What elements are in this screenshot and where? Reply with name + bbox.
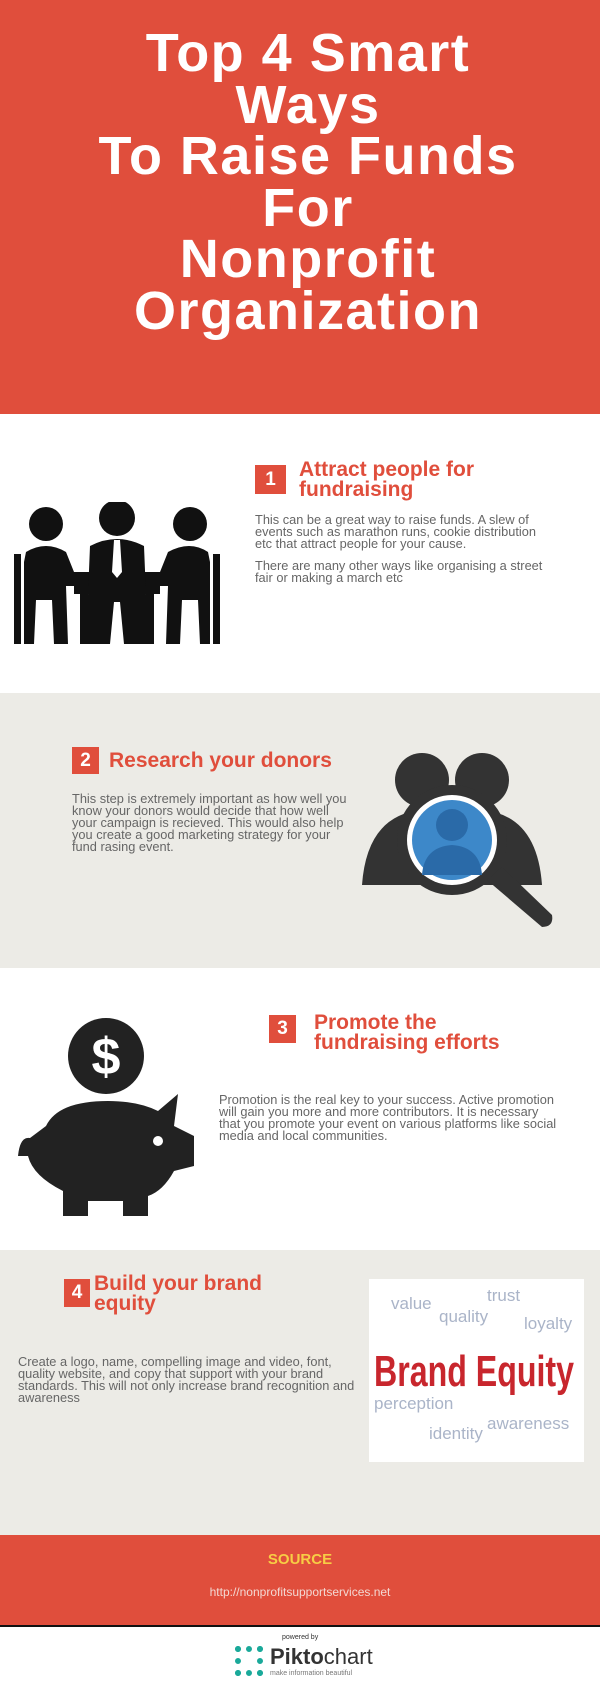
body text 1: There are many other ways like organising a street <box>255 558 542 573</box>
icon: meeting people <box>14 502 220 644</box>
brand equity word cloud: identity <box>429 1424 483 1443</box>
body text 2: fund rasing event. <box>72 839 174 854</box>
body text 2: your campaign is recieved. This would also help <box>72 815 343 830</box>
panel: section 3 <box>0 968 600 1250</box>
body text 3: that you promote your event on various platforms like social <box>219 1116 556 1131</box>
title <box>98 23 518 340</box>
icon: piggy bank <box>18 1018 194 1216</box>
title: To Raise Funds <box>98 126 518 186</box>
body text 3: Promotion is the real key to your success. Active promotion <box>219 1092 554 1107</box>
title: For <box>262 178 354 238</box>
heading 3 <box>314 1011 500 1054</box>
body text 2: This step is extremely important as how well you <box>72 791 347 806</box>
body text 2: you create a good marketing strategy for your <box>72 827 330 842</box>
body text 3: will gain you more and more contributors. It is necessary <box>219 1104 538 1119</box>
body text 1: etc that attract people for your cause. <box>255 536 466 551</box>
number 1 <box>255 465 286 494</box>
panel: section 1 <box>0 414 600 693</box>
header panel <box>0 0 600 414</box>
brand equity word cloud: trust <box>487 1286 520 1305</box>
piktochart logo: make information beautiful <box>270 1670 352 1677</box>
title: Ways <box>235 74 381 134</box>
body text 1: events such as marathon runs, cookie distribution <box>255 524 536 539</box>
heading 1 <box>299 458 474 501</box>
source url: http://nonprofitsupportservices.net <box>210 1585 390 1599</box>
body text 2: know your donors would decide that how well <box>72 803 329 818</box>
heading 1: Attract people for <box>299 458 474 481</box>
brand equity word cloud: value <box>391 1294 432 1313</box>
piktochart logo: powered by <box>282 1634 318 1641</box>
heading 4 <box>94 1272 262 1315</box>
icon: piggy bank: $ <box>92 1028 121 1086</box>
heading 2: Research your donors <box>109 749 332 772</box>
brand equity word cloud: loyalty <box>524 1314 573 1333</box>
body text 3: media and local communities. <box>219 1128 388 1143</box>
heading 3: Promote the <box>314 1011 437 1034</box>
body text 4 <box>18 1354 354 1405</box>
title: Top 4 Smart <box>146 23 470 83</box>
heading 4: Build your brand <box>94 1272 262 1295</box>
body text 3 <box>219 1092 556 1143</box>
body text 4: awareness <box>18 1390 80 1405</box>
panel: section 2 <box>0 693 600 968</box>
piktochart logo: Piktochart <box>270 1644 373 1669</box>
brand equity word cloud: quality <box>439 1307 489 1326</box>
heading 3: fundraising efforts <box>314 1031 500 1054</box>
number 2 <box>72 747 99 774</box>
source label: SOURCE <box>268 1551 332 1568</box>
icon: donor search <box>362 753 552 927</box>
body text 4: standards. This will not only increase brand recognition and <box>18 1378 354 1393</box>
piktochart logo <box>235 1634 373 1677</box>
brand equity word cloud: awareness <box>487 1414 569 1433</box>
number 1: 1 <box>265 469 276 490</box>
title: Nonprofit <box>180 229 436 289</box>
body text 2 <box>72 791 347 854</box>
heading 1: fundraising <box>299 478 413 501</box>
panel: section 4 <box>0 1250 600 1535</box>
body text 4: Create a logo, name, compelling image and video, font, <box>18 1354 332 1369</box>
body text 4: quality website, and copy that support with your brand <box>18 1366 323 1381</box>
body text 1: fair or making a march etc <box>255 570 403 585</box>
brand equity word cloud <box>369 1279 584 1462</box>
title: Organization <box>134 280 482 340</box>
number 4: 4 <box>72 1282 82 1303</box>
heading 4: equity <box>94 1292 156 1315</box>
brand equity word cloud: perception <box>374 1394 453 1413</box>
body text 1: This can be a great way to raise funds. A slew of <box>255 512 529 527</box>
number 4 <box>64 1279 90 1307</box>
number 3 <box>269 1015 296 1043</box>
body text 1 <box>255 512 542 585</box>
number 2: 2 <box>80 750 91 771</box>
number 3: 3 <box>277 1018 288 1039</box>
footer panel <box>0 1535 600 1625</box>
